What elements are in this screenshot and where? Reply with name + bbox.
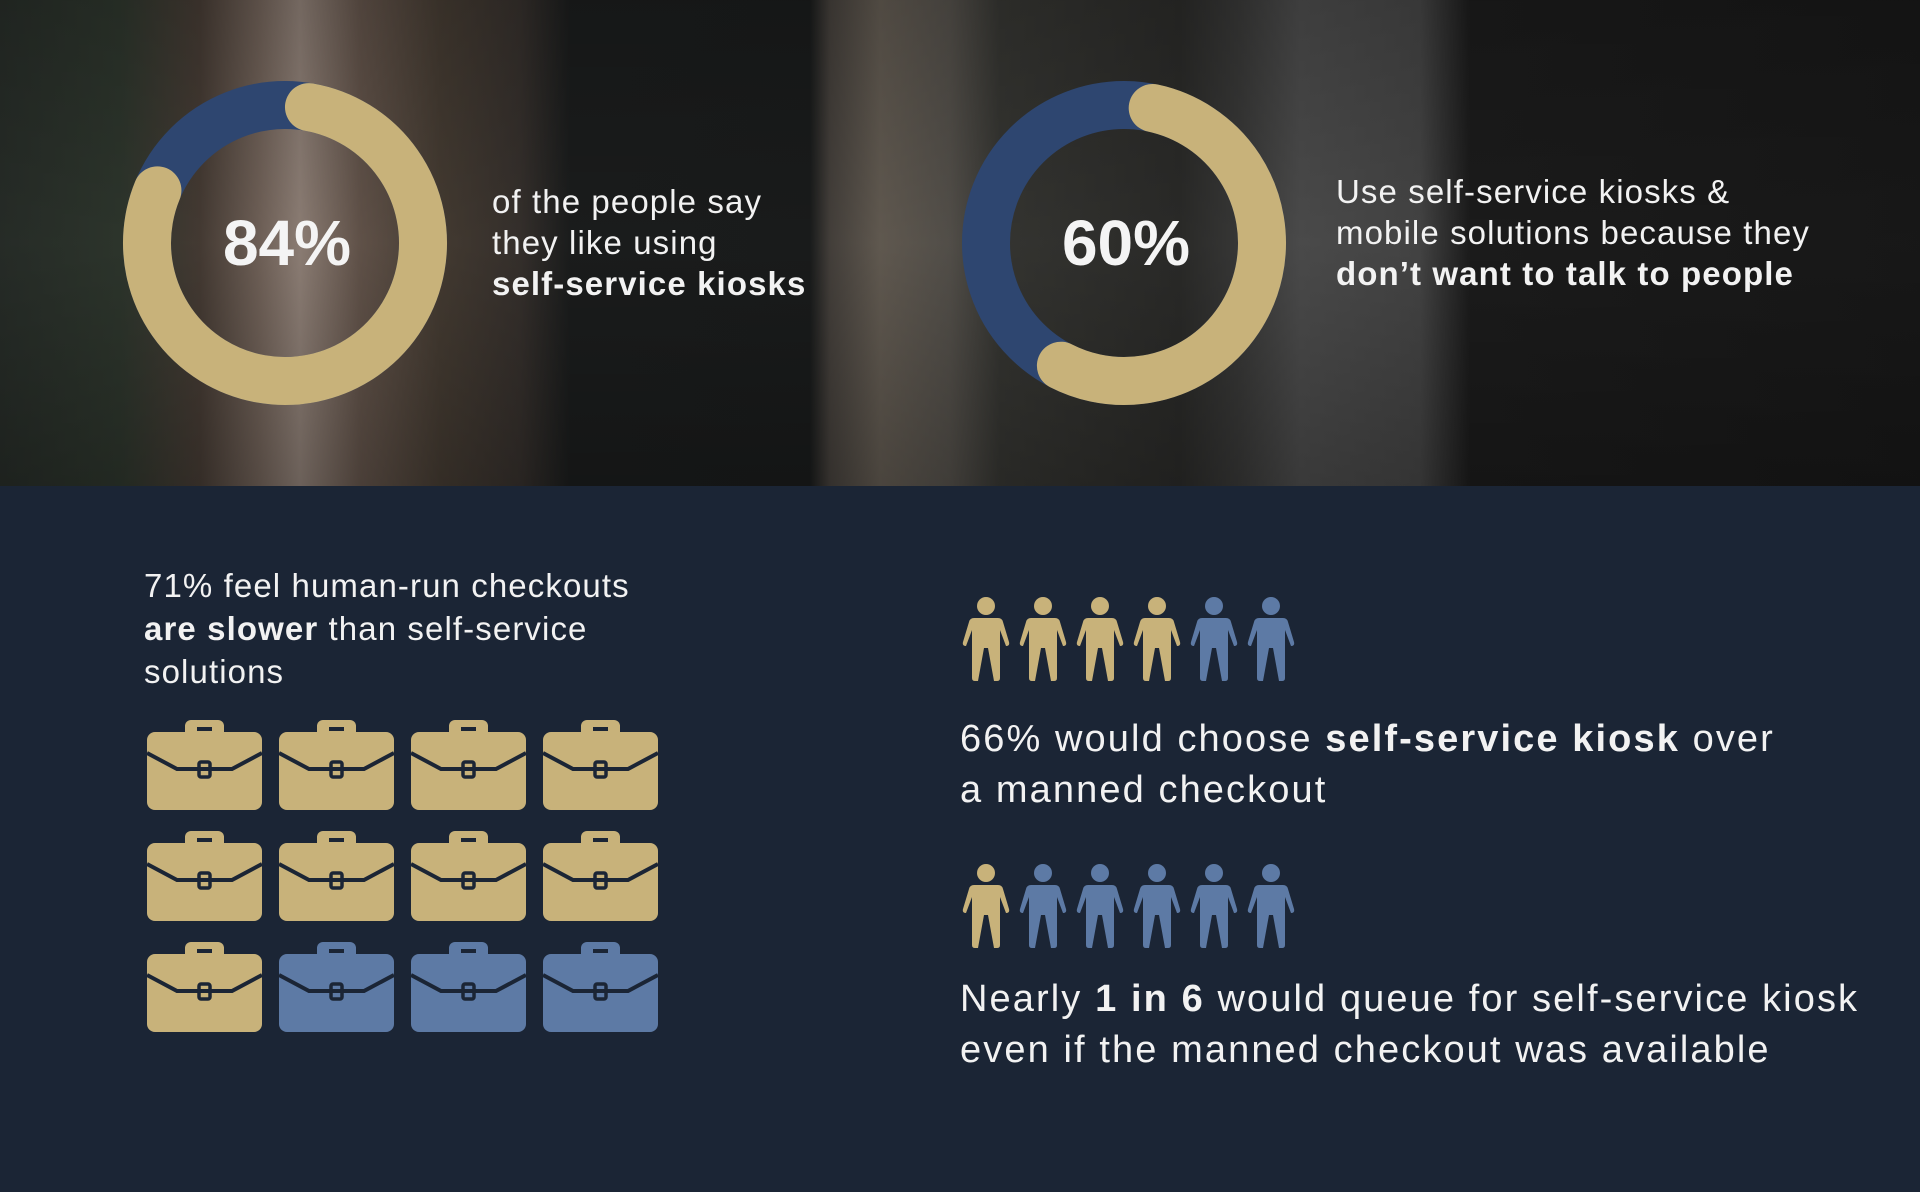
text: 60% description [1336, 173, 1810, 292]
background photo [0, 0, 1920, 486]
text: 71% slower: 71% feel human-run checkouts [144, 567, 630, 604]
briefcase grid [147, 720, 658, 1032]
text: 1 in 6 queue: Nearly 1 in 6 would queue for self-service kiosk [960, 978, 1859, 1020]
people row: 66% [962, 597, 1294, 681]
text: 60% description: don’t want to talk to people [1336, 255, 1794, 292]
text: 1 in 6 queue: even if the manned checkout was available [960, 1029, 1771, 1071]
text: 71% slower: solutions [144, 653, 284, 690]
text: 60% description: Use self-service kiosks & [1336, 173, 1730, 210]
text: 84% description [492, 183, 806, 302]
text: 66% choose kiosk: a manned checkout [960, 769, 1327, 811]
people row: 1 in 6 [962, 864, 1294, 948]
donut chart: 84% [123, 81, 447, 405]
text: 84% description: they like using [492, 224, 718, 261]
text: 71% slower [144, 567, 630, 690]
text: 60% description: mobile solutions because they [1336, 214, 1810, 251]
text: 84% description: of the people say [492, 183, 762, 220]
text: 1 in 6 queue [960, 978, 1859, 1071]
text: 66% choose kiosk [960, 718, 1775, 811]
text: 66% choose kiosk: 66% would choose self-service kiosk over [960, 718, 1775, 760]
donut chart: 60% [962, 81, 1286, 405]
donut chart: 60%: 60% [1062, 207, 1190, 279]
text: 71% slower: are slower than self-service [144, 610, 588, 647]
donut chart: 84%: 84% [223, 207, 351, 279]
text: 84% description: self-service kiosks [492, 265, 806, 302]
